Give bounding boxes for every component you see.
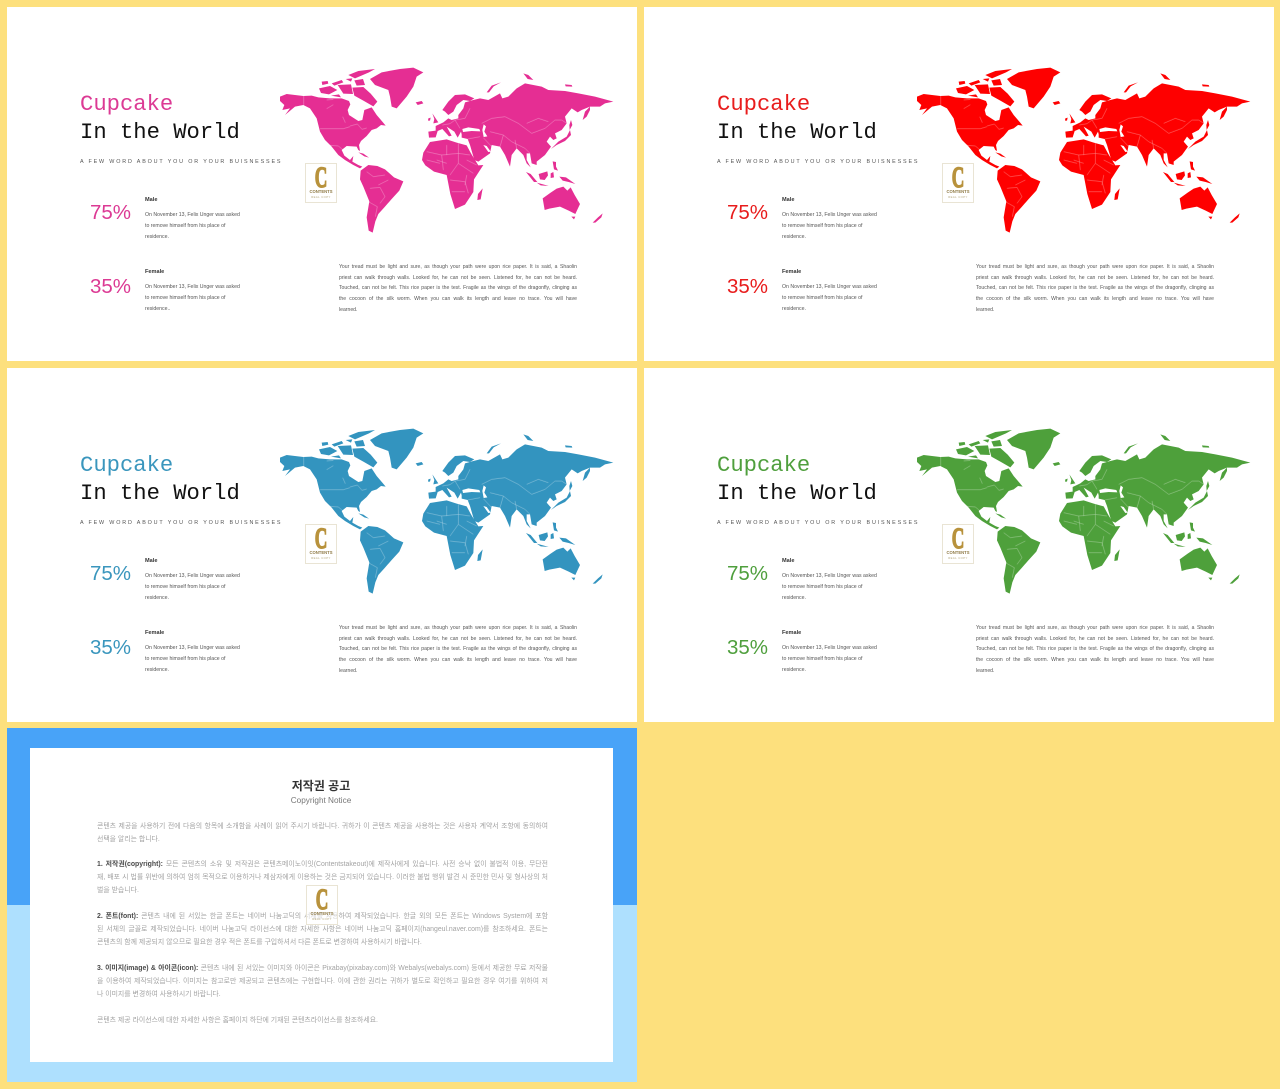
stat: female 35% <box>90 269 240 312</box>
logo: REAL COPY <box>311 195 331 199</box>
stat: male 75%: to remove himself from his place of <box>782 584 862 590</box>
stat: female 35%: residence.. <box>145 306 170 312</box>
stat: male 75% <box>727 558 877 601</box>
paragraph <box>339 625 577 674</box>
logo: CONTENTS <box>946 550 970 555</box>
title: Cupcake: Cupcake <box>717 92 810 117</box>
stat: male 75%: to remove himself from his place of <box>145 584 225 590</box>
stat: male 75%: Male <box>145 197 157 203</box>
closing line: 콘텐츠 제공 라이선스에 대한 자세한 사항은 홈페이지 하단에 기재된 콘텐츠라이선스를 참조하세요. <box>97 1017 378 1024</box>
stat: female 35%: residence. <box>145 667 169 673</box>
logo: CONTENTS <box>310 911 334 916</box>
stat: female 35%: On November 13, Felix Unger was asked <box>782 645 877 651</box>
paragraph: priest can walk through walls. Looked for, he can not be seen. Listened for, he can not be heard. <box>976 275 1214 281</box>
tagline: A FEW WORD ABOUT YOU OR YOUR BUISNESSES <box>80 520 282 526</box>
title: In the World: In the World <box>717 120 877 145</box>
logo: CONTENTS <box>309 189 333 194</box>
stat: male 75%: to remove himself from his place of <box>782 223 862 229</box>
stat: male 75%: to remove himself from his place of <box>145 223 225 229</box>
paragraph: learned. <box>976 307 994 313</box>
section 3 image and icon: 3. 이미지(image) & 아이콘(icon): 콘텐츠 내에 된 서있는 이미지와 아이콘은 Pixabay(pixabay.com)와 Webalys(webalys.com) 등에서 제공한 무료 저작물 <box>97 965 548 972</box>
stat: female 35%: 35% <box>90 636 131 659</box>
panel: copyright notice <box>7 728 637 1082</box>
panel: red world slide <box>644 7 1274 361</box>
stat: female 35%: Female <box>782 630 801 636</box>
title: In the World: In the World <box>717 481 877 506</box>
paragraph: Touched, can not be felt. This rice paper is the test. Fragile as the wings of the dragonfly, clinging as <box>976 646 1214 652</box>
panel: magenta world slide <box>7 7 637 361</box>
notice intro line 2: 선택을 알리는 합니다. <box>97 836 160 843</box>
logo: REAL COPY <box>311 556 331 560</box>
stat: female 35%: 35% <box>727 636 768 659</box>
stat: female 35%: to remove himself from his place of <box>145 656 225 662</box>
paragraph: Your tread must be light and sure, as though your path were upon rice paper. It is said, a Shaolin <box>976 625 1214 631</box>
stat: female 35%: residence. <box>782 667 806 673</box>
stat: female 35%: to remove himself from his place of <box>782 295 862 301</box>
stat: male 75%: Male <box>782 558 794 564</box>
stat: male 75%: 75% <box>727 562 768 585</box>
white notice card <box>30 748 613 1062</box>
tagline: A FEW WORD ABOUT YOU OR YOUR BUISNESSES <box>80 159 282 165</box>
stat: male 75%: 75% <box>727 201 768 224</box>
stat: female 35%: to remove himself from his place of <box>145 295 225 301</box>
paragraph: Touched, can not be felt. This rice paper is the test. Fragile as the wings of the dragonfly, clinging as <box>339 285 577 291</box>
stat: male 75%: 75% <box>90 562 131 585</box>
section 2 font: 2. 폰트(font): 콘텐츠 내에 된 서있는 한글 폰트는 네이버 나눔고딕의 서체를 사용하여 제작되었습니다. 한글 외의 모든 폰트는 Windows System에 포함 <box>97 913 548 920</box>
world map <box>280 428 614 594</box>
stat: female 35%: On November 13, Felix Unger was asked <box>782 284 877 290</box>
stat: female 35% <box>727 630 877 673</box>
logo <box>306 885 338 925</box>
paragraph: Your tread must be light and sure, as though your path were upon rice paper. It is said, a Shaolin <box>339 264 577 270</box>
logo: CONTENTS <box>946 189 970 194</box>
section 1 line 2: 재, 배포 시 법률 위반에 의하여 엄히 목적으로 이용하거나 제삼자에게 이용하는 것은 금지되어 있습니다. 이러한 불법 행위 발견 시 준민한 민사 및 형사상의 처 <box>97 874 548 881</box>
stat: female 35%: to remove himself from his place of <box>782 656 862 662</box>
stat: male 75%: Male <box>145 558 157 564</box>
logo <box>942 524 974 564</box>
stat: male 75%: Male <box>782 197 794 203</box>
paragraph: Touched, can not be felt. This rice paper is the test. Fragile as the wings of the dragonfly, clinging as <box>339 646 577 652</box>
paragraph: the cocoon of the silk worm. When you can walk its length and leave no trace. You will have <box>976 296 1214 302</box>
world map <box>917 428 1250 594</box>
paragraph: Your tread must be light and sure, as though your path were upon rice paper. It is said, a Shaolin <box>339 625 577 631</box>
stat: female 35%: residence. <box>782 306 806 312</box>
section 3 line 3: 나 이미지를 변경하여 사용하시기 바랍니다. <box>97 991 221 998</box>
section 2 line 3: 콘텐츠의 함께 제공되지 않으므로 필요한 경우 적은 폰트를 구입하셔서 다른 폰트로 변경하여 사용하시기 바랍니다. <box>97 939 422 946</box>
paragraph: priest can walk through walls. Looked for, he can not be seen. Listened for, he can not be heard. <box>339 275 577 281</box>
stat: female 35% <box>90 630 240 673</box>
stat: female 35%: Female <box>145 630 164 636</box>
stat: male 75%: residence. <box>145 234 169 240</box>
tagline: A FEW WORD ABOUT YOU OR YOUR BUISNESSES <box>717 159 919 165</box>
paragraph <box>976 264 1214 313</box>
stat: female 35%: Female <box>782 269 801 275</box>
stat: female 35%: On November 13, Felix Unger was asked <box>145 645 240 651</box>
section 3 line 2: 을 이용하여 제작되었습니다. 이미지는 참고로만 제공되고 콘텐츠에는 구현합니다. 이에 관한 권리는 귀하가 별도로 확인하고 필요한 경우 여기를 위하여 저 <box>97 978 548 985</box>
title: In the World: In the World <box>80 481 240 506</box>
paragraph: learned. <box>976 668 994 674</box>
logo <box>305 524 337 564</box>
title: Cupcake: Cupcake <box>717 453 810 478</box>
stat: male 75%: On November 13, Felix Unger was asked <box>145 212 240 218</box>
tagline: A FEW WORD ABOUT YOU OR YOUR BUISNESSES <box>717 520 919 526</box>
stat: male 75% <box>90 197 240 240</box>
paragraph: the cocoon of the silk worm. When you can walk its length and leave no trace. You will have <box>976 657 1214 663</box>
stat: male 75%: residence. <box>782 595 806 601</box>
paragraph <box>339 264 577 313</box>
subheading: Copyright Notice: Copyright Notice <box>291 796 351 805</box>
section 1 copyright: 1. 저작권(copyright): 모든 콘텐츠의 소유 및 저작권은 콘텐츠메이노이잇(Contentstakeout)에 제작사에게 있습니다. 사전 승낙 없이 불법적 이용, 무단전 <box>97 861 548 868</box>
world map <box>917 68 1250 233</box>
stat: male 75%: On November 13, Felix Unger was asked <box>782 573 877 579</box>
stat: male 75%: 75% <box>90 201 131 224</box>
notice intro: 콘텐츠 제공을 사용하기 전에 다음의 항목에 소개함을 사례이 읽어 주시기 바랍니다. 귀하가 이 콘텐츠 제공을 사용하는 것은 사용자 계약서 조항에 동의하여 <box>97 823 548 830</box>
paragraph <box>976 625 1214 674</box>
paragraph: learned. <box>339 307 357 313</box>
paragraph: the cocoon of the silk worm. When you can walk its length and leave no trace. You will have <box>339 657 577 663</box>
stat: male 75% <box>727 197 877 240</box>
logo: REAL COPY <box>948 195 968 199</box>
panel: green world slide <box>644 368 1274 722</box>
stat: female 35% <box>727 269 877 312</box>
logo <box>942 163 974 203</box>
stat: male 75%: residence. <box>145 595 169 601</box>
stat: female 35%: Female <box>145 269 164 275</box>
stat: female 35%: On November 13, Felix Unger was asked <box>145 284 240 290</box>
logo: REAL COPY <box>948 556 968 560</box>
title: Cupcake: Cupcake <box>80 92 173 117</box>
panel: blue world slide <box>7 368 637 722</box>
section 1 line 3: 벌을 받습니다. <box>97 887 139 894</box>
paragraph: learned. <box>339 668 357 674</box>
stat: male 75% <box>90 558 240 601</box>
paragraph: the cocoon of the silk worm. When you can walk its length and leave no trace. You will have <box>339 296 577 302</box>
paragraph: priest can walk through walls. Looked for, he can not be seen. Listened for, he can not be heard. <box>339 636 577 642</box>
title: Cupcake: Cupcake <box>80 453 173 478</box>
paragraph: Touched, can not be felt. This rice paper is the test. Fragile as the wings of the dragonfly, clinging as <box>976 285 1214 291</box>
world map <box>280 68 614 233</box>
stat: male 75%: On November 13, Felix Unger was asked <box>145 573 240 579</box>
logo: REAL COPY <box>312 917 332 921</box>
logo: CONTENTS <box>309 550 333 555</box>
logo <box>305 163 337 203</box>
title: In the World: In the World <box>80 120 240 145</box>
stat: female 35%: 35% <box>90 275 131 298</box>
stat: male 75%: On November 13, Felix Unger was asked <box>782 212 877 218</box>
section 2 line 2: 된 서체의 글꼴로 제작되었습니다. 네이버 나눔고딕 라이선스에 대한 자세한 사항은 네이버 나눔고딕 홈페이지(hangeul.naver.com)를 참조하세요. 폰트는 <box>97 926 548 933</box>
stat: female 35%: 35% <box>727 275 768 298</box>
paragraph: priest can walk through walls. Looked for, he can not be seen. Listened for, he can not be heard. <box>976 636 1214 642</box>
stat: male 75%: residence. <box>782 234 806 240</box>
heading: copyright notice Korean: 저작권 공고 <box>292 779 350 793</box>
paragraph: Your tread must be light and sure, as though your path were upon rice paper. It is said, a Shaolin <box>976 264 1214 270</box>
